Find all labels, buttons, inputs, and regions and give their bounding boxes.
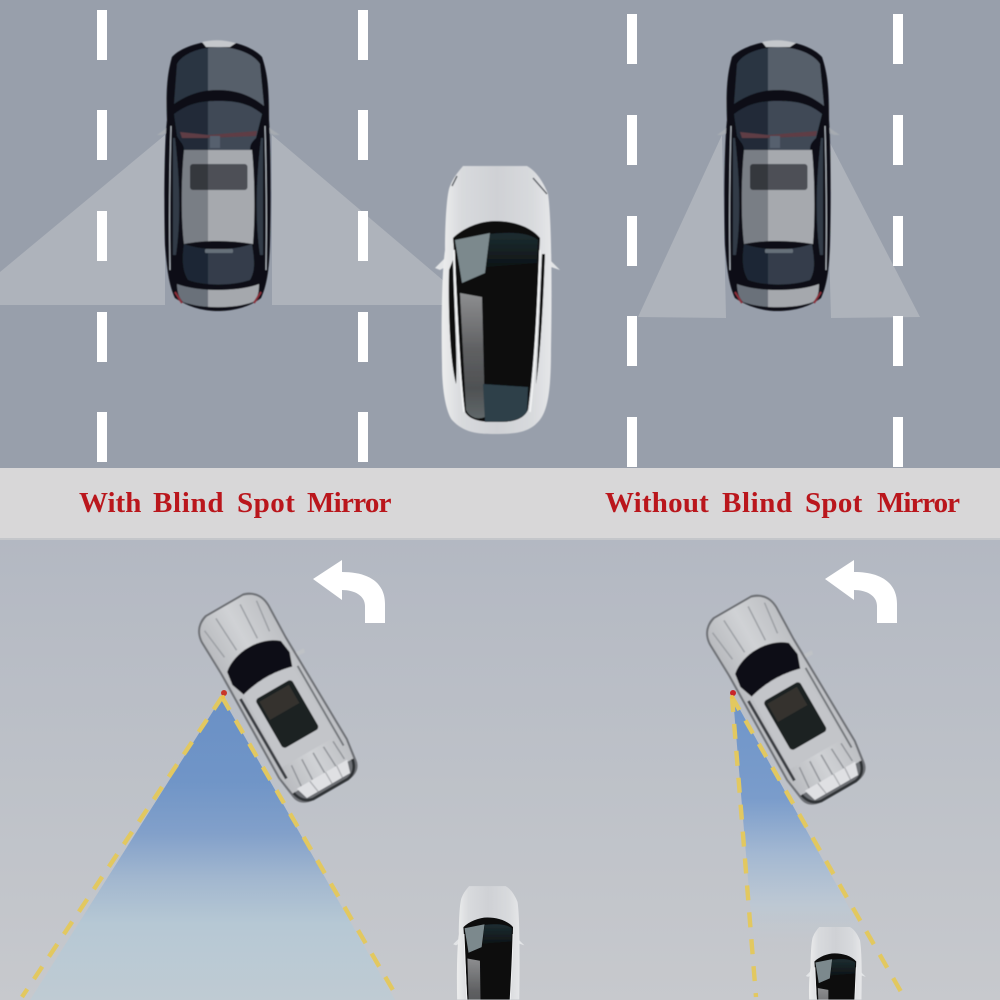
narrow mirror view cones (638, 135, 920, 318)
label: without blind spot mirror: Spot (805, 487, 863, 519)
panel: turning scenes (0, 540, 1000, 1000)
panel: road top with two lane scenes (0, 0, 1000, 468)
label: with blind spot mirror: Mirror (307, 487, 392, 519)
label: with blind spot mirror: Spot (237, 487, 295, 519)
lane markings: left scene left line (97, 10, 107, 462)
label: without blind spot mirror: Without (605, 487, 709, 519)
approaching white car right scene (806, 927, 866, 999)
wide blue view cone (22, 697, 397, 1000)
turn arrow left scene (313, 560, 385, 623)
narrow blue view cone (732, 697, 904, 1000)
approaching white car left scene (453, 886, 524, 1000)
label: with blind spot mirror: Blind (153, 487, 224, 519)
label: without blind spot mirror: Mirror (877, 487, 960, 519)
label: without blind spot mirror: Blind (722, 487, 793, 519)
dark car with blind spot mirror (157, 40, 280, 311)
lane markings: right scene right line (893, 14, 903, 467)
caption band (0, 468, 1000, 540)
mirror marker right (730, 690, 736, 699)
label: with blind spot mirror: With (79, 487, 141, 519)
turning SUV right scene (697, 583, 880, 812)
mirror marker left (221, 690, 227, 699)
turning SUV left scene (189, 581, 372, 810)
dark car without blind spot mirror (717, 40, 840, 311)
lane markings: left scene right line (358, 10, 368, 462)
wide mirror view cones (0, 135, 450, 305)
turn arrow right scene (825, 560, 897, 623)
white car in adjacent lane (435, 166, 560, 434)
lane markings: right scene left line (627, 14, 637, 467)
